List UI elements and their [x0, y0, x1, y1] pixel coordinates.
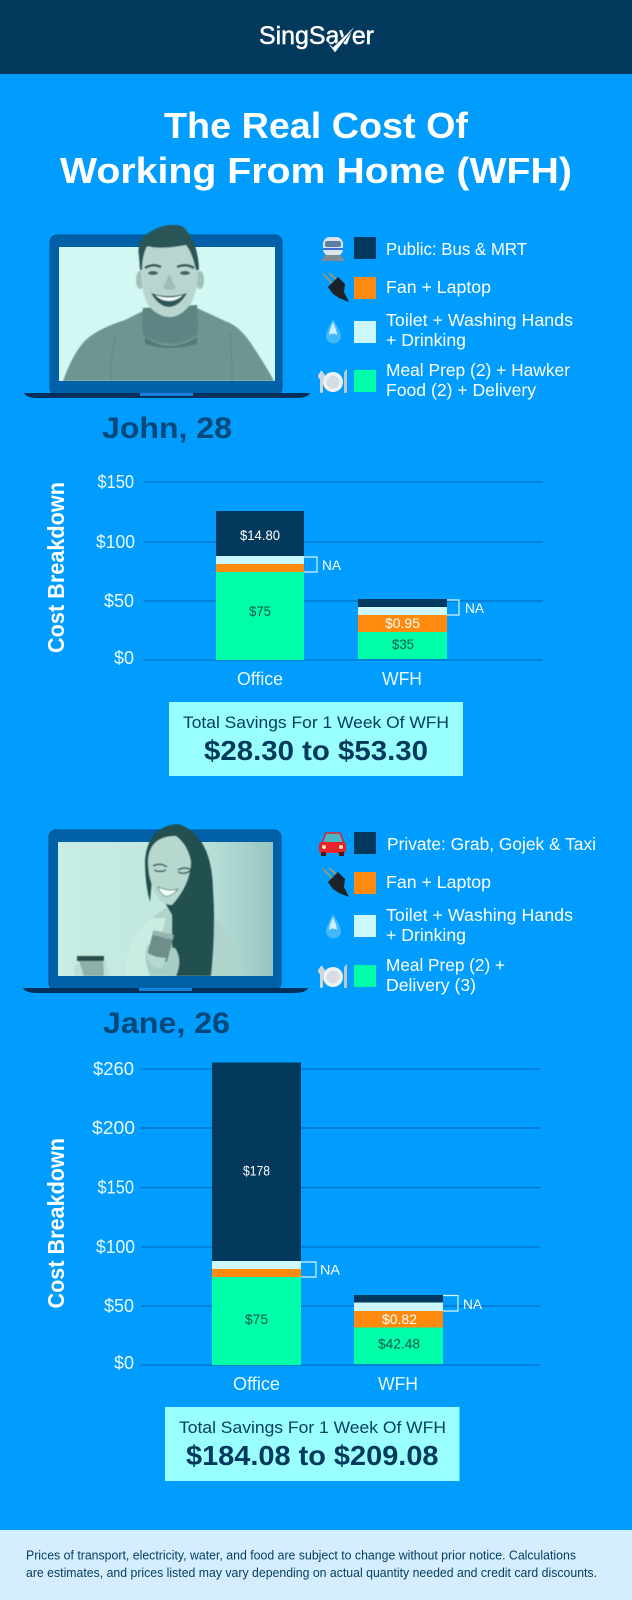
label: fan and laptop: Fan + Laptop — [386, 277, 491, 297]
label: water: Toilet + Washing Hands — [386, 310, 573, 330]
panel: Jane laptop with photo — [23, 824, 308, 993]
bar: Office: $178 — [243, 1162, 270, 1178]
panel: John laptop with photo — [24, 225, 310, 398]
bar: Office: $75 — [249, 603, 271, 619]
bar: Office — [216, 511, 342, 660]
bar: WFH: $0.95 — [385, 615, 420, 631]
swatch: electricity — [354, 277, 376, 299]
legend: John — [318, 237, 573, 400]
swatch: electricity — [354, 872, 376, 894]
axis title: Cost Breakdown — [43, 1138, 69, 1308]
bar chart: John cost breakdown — [43, 472, 543, 689]
swatch: water — [354, 915, 376, 937]
callout: Jane savings: Total Savings For 1 Week Of WFH — [179, 1418, 446, 1437]
label: water — [386, 905, 573, 945]
callout: Jane savings: $184.08 to $209.08 — [186, 1440, 438, 1471]
y axis labels: $200 — [92, 1118, 135, 1138]
y axis labels: $150 — [98, 472, 134, 492]
footer disclaimer: Prices of transport, electricity, water, and food are subject to change without prior notice. Calculations — [26, 1548, 576, 1562]
swatch: water — [354, 321, 376, 343]
y axis labels: $50 — [104, 591, 134, 611]
y axis labels: $0 — [114, 648, 134, 668]
y axis labels — [96, 472, 135, 668]
y axis labels: $0 — [114, 1353, 134, 1373]
icon: water drop — [326, 319, 341, 344]
label: private transport: Private: Grab, Gojek & Taxi — [387, 834, 596, 854]
y axis labels: $100 — [96, 532, 135, 552]
bar: WFH: NA — [463, 1296, 483, 1312]
swatch: transport — [354, 237, 376, 259]
y axis labels: $100 — [96, 1237, 135, 1257]
x axis labels: WFH — [382, 669, 422, 689]
bar: WFH: $0.82 — [382, 1311, 417, 1327]
x axis labels: Office — [237, 669, 283, 689]
label: water: Toilet + Washing Hands — [386, 905, 573, 925]
icon: plate and cutlery — [318, 369, 347, 393]
swatch: food — [354, 370, 376, 392]
x axis labels — [237, 669, 422, 689]
bar: Office — [212, 1062, 341, 1365]
label: food: Food (2) + Delivery — [386, 380, 536, 400]
bar: WFH: $35 — [392, 636, 414, 652]
callout: Jane savings — [165, 1407, 460, 1481]
bar: Office: $75 — [245, 1311, 268, 1327]
bar: WFH — [358, 599, 485, 659]
x axis labels: Office — [233, 1374, 280, 1394]
bar: WFH: NA — [465, 600, 485, 616]
swatch: food — [354, 965, 376, 987]
bar: Office: NA — [320, 1262, 341, 1278]
label: food: Delivery (3) — [386, 975, 476, 995]
icon: plug — [323, 868, 349, 897]
swatch: transport — [354, 832, 376, 854]
label: food — [386, 955, 505, 995]
icon: plug — [323, 273, 349, 302]
y axis labels — [92, 1059, 135, 1373]
bar: WFH: $42.48 — [378, 1336, 420, 1352]
bar: WFH — [354, 1295, 483, 1364]
heading: Jane, 26: Jane, 26 — [103, 1007, 230, 1040]
photo: John smiling — [63, 225, 274, 381]
label: water: + Drinking — [386, 330, 466, 350]
footer disclaimer: are estimates, and prices listed may vary depending on actual quantity needed and credit card discounts. — [26, 1565, 597, 1580]
icon: plate and cutlery — [318, 964, 347, 988]
bar: Office: $14.80 — [240, 527, 280, 543]
label: fan and laptop: Fan + Laptop — [386, 872, 491, 892]
x axis labels — [233, 1374, 418, 1394]
bar chart: Jane cost breakdown — [43, 1059, 540, 1394]
label: food: Meal Prep (2) + — [386, 955, 505, 975]
bar: Office: NA — [322, 557, 342, 573]
icon: car — [319, 833, 346, 856]
legend: Jane — [318, 832, 596, 995]
title — [60, 105, 572, 191]
logo: SingSaver: SingSaver — [259, 22, 374, 50]
y axis labels: $50 — [104, 1296, 134, 1316]
x axis labels: WFH — [378, 1374, 418, 1394]
title: Working From Home (WFH) — [60, 150, 572, 191]
header bar — [0, 0, 632, 74]
label: water — [386, 310, 573, 350]
callout: John savings — [169, 702, 463, 776]
label: food: Meal Prep (2) + Hawker — [386, 360, 570, 380]
label: water: + Drinking — [386, 925, 466, 945]
callout: John savings: $28.30 to $53.30 — [204, 735, 428, 766]
axis title: Cost Breakdown — [43, 482, 69, 653]
photo: Jane with phone and coffee — [74, 823, 221, 976]
callout: John savings: Total Savings For 1 Week Of WFH — [183, 713, 449, 732]
icon: water drop — [326, 914, 341, 938]
icon: train — [321, 237, 345, 261]
footer disclaimer — [0, 1530, 632, 1600]
y axis labels: $150 — [98, 1178, 134, 1198]
title: The Real Cost Of — [164, 105, 469, 146]
heading: John, 28: John, 28 — [102, 412, 232, 445]
label: food — [386, 360, 570, 400]
y axis labels: $260 — [93, 1059, 134, 1079]
label: public transport: Public: Bus & MRT — [386, 239, 527, 259]
